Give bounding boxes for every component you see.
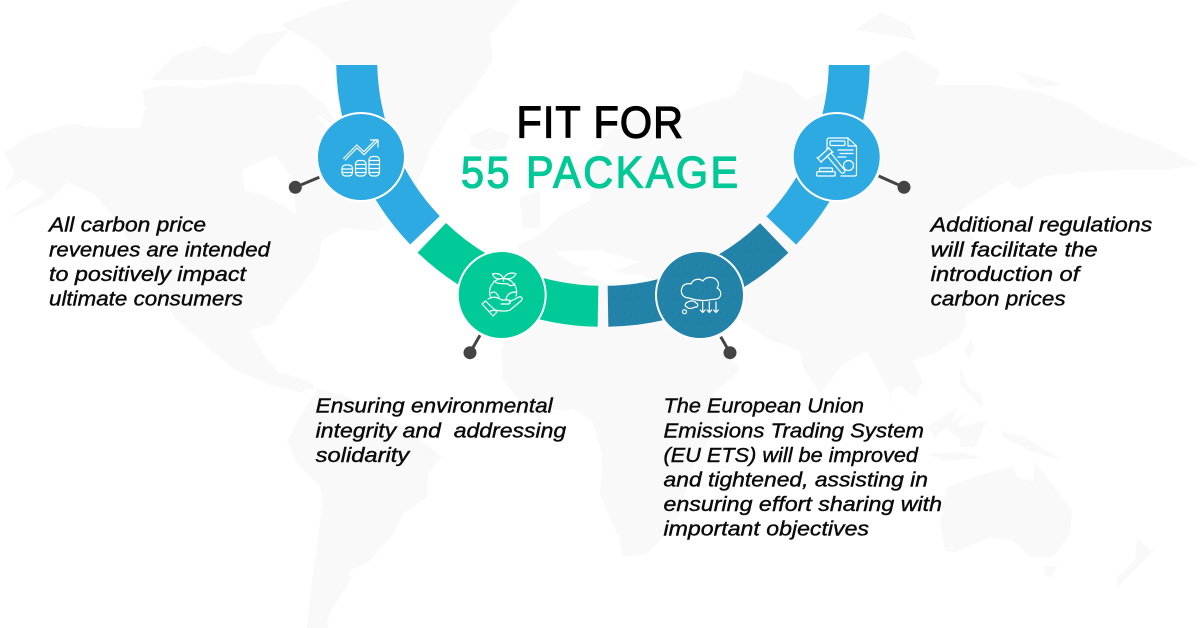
text block: additional regulations: carbon prices (931, 289, 1066, 311)
icon: gavel and document (817, 138, 856, 176)
text block: carbon price revenues (48, 215, 271, 311)
text block: EU ETS: (EU ETS) will be improved (664, 445, 919, 467)
title (461, 98, 738, 198)
node: additional regulations (793, 113, 881, 201)
text block: environmental integrity: integrity and addressing (316, 420, 566, 442)
infographic canvas (48, 65, 1152, 540)
text block: EU ETS (664, 396, 942, 541)
text block: environmental integrity (316, 396, 566, 467)
icon: cloud with down arrows (681, 277, 721, 314)
text block: EU ETS: important objectives (664, 519, 869, 541)
text block: carbon price revenues: ultimate consumers (49, 289, 243, 311)
text block: carbon price revenues: revenues are intended (49, 239, 271, 261)
text block: EU ETS: and tightened, assisting in (664, 470, 928, 492)
icon: rising chart and coins (342, 140, 380, 176)
connector pin: green (464, 335, 480, 359)
icon: globe in hand with sprout (482, 273, 522, 316)
text block: additional regulations: introduction of (931, 264, 1082, 286)
node: carbon revenue (317, 113, 405, 201)
text block: environmental integrity: solidarity (316, 445, 410, 467)
connector pin: right blue (879, 176, 910, 194)
connector pin: left blue (289, 177, 319, 194)
text block: EU ETS: The European Union (664, 396, 864, 418)
title: FIT FOR (516, 98, 683, 148)
text block: additional regulations (930, 215, 1152, 311)
text block: EU ETS: ensuring effort sharing with (664, 494, 942, 516)
arc: left blue segment (357, 60, 425, 230)
node: environmental integrity (458, 251, 546, 339)
arc: right blue segment (781, 60, 849, 230)
arc: teal segment (608, 238, 774, 306)
arc: green segment (432, 238, 598, 306)
text block: EU ETS: Emissions Trading System (664, 420, 924, 442)
text block: additional regulations: Additional regulations (930, 215, 1152, 237)
text block: additional regulations: will facilitate the (931, 239, 1098, 261)
text block: carbon price revenues: All carbon price (48, 215, 206, 237)
text block: carbon price revenues: to positively impact (49, 264, 248, 286)
text block: environmental integrity: Ensuring environmental (316, 396, 553, 418)
title: green line: 55 PACKAGE (461, 148, 738, 198)
map water cut-outs (242, 155, 1010, 380)
node: EU ETS (656, 251, 744, 339)
connector pin: teal (721, 337, 736, 359)
